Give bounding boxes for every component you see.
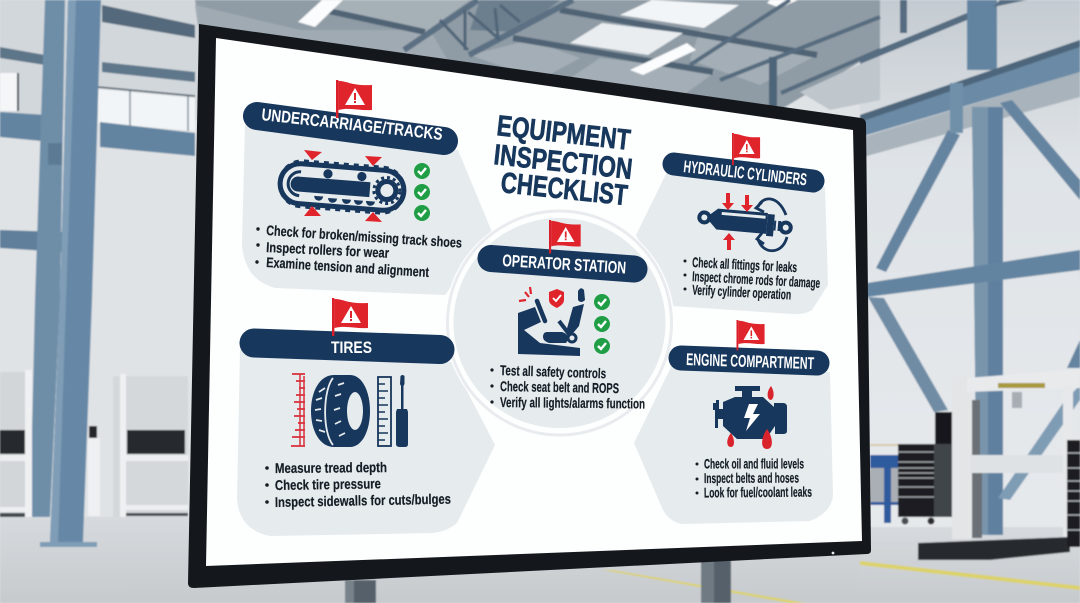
white service frame	[998, 385, 1080, 500]
title: EQUIPMENT	[495, 110, 632, 157]
heading: HYDRAULIC CYLINDERS	[683, 157, 808, 189]
bullet list: Verify all lights/alarms function	[500, 394, 645, 412]
icon: fluid drops	[727, 386, 774, 449]
floor lines and stand	[603, 570, 806, 603]
display screen	[206, 38, 862, 566]
icon: tire	[311, 375, 370, 447]
icon: warning flag	[736, 320, 765, 350]
icon: engine	[713, 386, 787, 439]
main column	[50, 0, 101, 542]
panel background	[636, 172, 828, 314]
bullet list: Check all fittings for leaks	[692, 254, 798, 275]
panel: engine compartment	[634, 320, 833, 524]
work bench and tool cabinets	[870, 468, 898, 503]
header pill	[257, 116, 444, 141]
display monitor frame	[188, 24, 871, 588]
bullet list	[255, 222, 463, 280]
icon: screwdriver	[396, 375, 408, 447]
panel: operator station	[448, 211, 672, 435]
bullet list: Verify cylinder operation	[692, 282, 792, 303]
ceiling	[195, 0, 880, 110]
heading: UNDERCARRIAGE/TRACKS	[261, 105, 444, 144]
bullet list	[684, 254, 821, 303]
header pill	[681, 358, 817, 363]
panel: hydraulic cylinders	[636, 133, 828, 314]
icon: green checks	[414, 163, 430, 221]
title: CHECKLIST	[499, 167, 629, 212]
icon: crawler track	[278, 160, 406, 214]
icon: tread depth scale	[291, 374, 305, 446]
bullet list: Test all safety controls	[500, 362, 606, 381]
panel background	[454, 218, 666, 428]
right structure	[967, 0, 997, 70]
header pill	[254, 343, 440, 350]
bullet list: Check seat belt and ROPS	[500, 378, 619, 396]
left upper beams and windows	[102, 5, 195, 38]
bullet list: Inspect rollers for wear	[266, 239, 390, 261]
icon: ruler	[378, 377, 391, 446]
icon: safety shield	[549, 289, 564, 308]
icon: circular arrows	[756, 199, 787, 251]
icon: warning flag	[336, 80, 372, 118]
shelves	[0, 372, 32, 517]
title: INSPECTION	[492, 139, 634, 186]
panel background	[237, 350, 495, 536]
back column	[30, 0, 65, 517]
circle ring	[448, 211, 672, 435]
bullet list	[490, 362, 645, 412]
heading: ENGINE COMPARTMENT	[686, 350, 815, 373]
bullet list: Check oil and fluid levels	[704, 456, 804, 472]
bullet list: Inspect belts and hoses	[704, 470, 799, 486]
icon: warning flag	[549, 220, 581, 253]
icon: warning flag	[732, 133, 760, 165]
power indicator	[832, 552, 834, 554]
icon: warning flag	[332, 298, 368, 336]
icon: operator seat and controls	[518, 288, 585, 356]
bullet list	[696, 456, 812, 500]
icon: hydraulic cylinder	[698, 207, 792, 238]
panel: tires	[237, 298, 495, 536]
heading: OPERATOR STATION	[502, 251, 627, 278]
panel: undercarriage/tracks	[242, 80, 492, 295]
bullet list: Check for broken/missing track shoes	[266, 222, 463, 251]
panel background	[242, 125, 492, 295]
bullet list: Measure tread depth	[275, 459, 387, 476]
header pill	[674, 164, 813, 181]
icon: red pressure arrows	[722, 193, 753, 250]
header pill	[491, 258, 634, 269]
bullet list: Examine tension and alignment	[266, 254, 430, 280]
heading: TIRES	[331, 338, 372, 357]
icon: red alert rays	[519, 287, 531, 301]
bullet list: Look for fuel/coolant leaks	[704, 484, 812, 500]
title	[492, 110, 634, 212]
icon: red inspection markers	[304, 150, 382, 222]
bullet list: Check tire pressure	[275, 475, 381, 493]
bullet list: Inspect sidewalls for cuts/bulges	[275, 491, 451, 510]
bullet list	[265, 459, 451, 510]
panel background	[634, 365, 833, 524]
bullet list: Inspect chrome rods for damage	[692, 268, 821, 291]
icon: green checks	[594, 294, 610, 354]
